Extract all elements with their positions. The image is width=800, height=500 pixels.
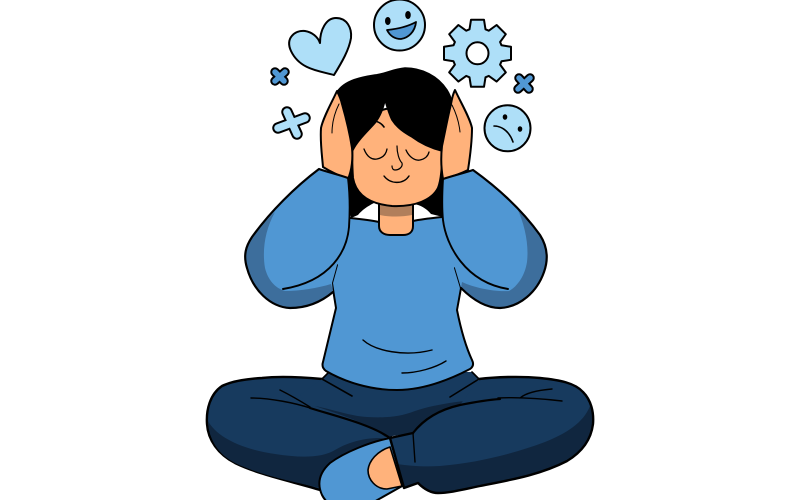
right sleeve outline xyxy=(443,170,547,308)
right sleeve crease xyxy=(442,179,508,289)
left sleeve shadow xyxy=(246,212,333,307)
foot xyxy=(319,438,404,500)
icon: sad face xyxy=(484,105,530,151)
pants: waist and lap xyxy=(300,372,500,437)
left sleeve outline xyxy=(245,169,348,308)
hair: front fringe xyxy=(337,68,452,151)
pants xyxy=(207,372,593,500)
pants: waist outline xyxy=(322,372,479,397)
sweater outline xyxy=(322,217,473,390)
pants: right leg xyxy=(390,377,593,493)
pants: right leg shadow xyxy=(397,403,592,492)
hair: back xyxy=(347,140,446,218)
pants: right leg outline xyxy=(390,377,593,493)
icon: small cross left xyxy=(275,72,285,81)
icon: smiling face xyxy=(374,0,425,50)
smile xyxy=(384,176,409,182)
left sleeve crease xyxy=(283,178,350,289)
pants: fold lines xyxy=(251,389,562,462)
left sleeve xyxy=(245,169,350,308)
neck xyxy=(379,200,413,235)
hair strand on forehead xyxy=(375,121,384,127)
right sleeve xyxy=(442,170,547,308)
nose xyxy=(392,146,402,170)
left hand xyxy=(321,91,352,179)
sweater torso xyxy=(322,217,473,390)
pants: left leg shadow xyxy=(208,421,392,488)
icon: small cross right xyxy=(518,78,530,89)
icon: large cross xyxy=(278,112,305,134)
pants: left leg xyxy=(207,377,400,490)
sweater fold lines xyxy=(363,340,446,373)
closed eyes xyxy=(364,149,429,160)
right sleeve shadow xyxy=(461,208,546,307)
face xyxy=(352,108,442,206)
right hand xyxy=(441,90,472,179)
icon: gear xyxy=(444,20,511,87)
pants: lap shadow xyxy=(315,398,505,437)
icon: heart xyxy=(289,18,351,75)
